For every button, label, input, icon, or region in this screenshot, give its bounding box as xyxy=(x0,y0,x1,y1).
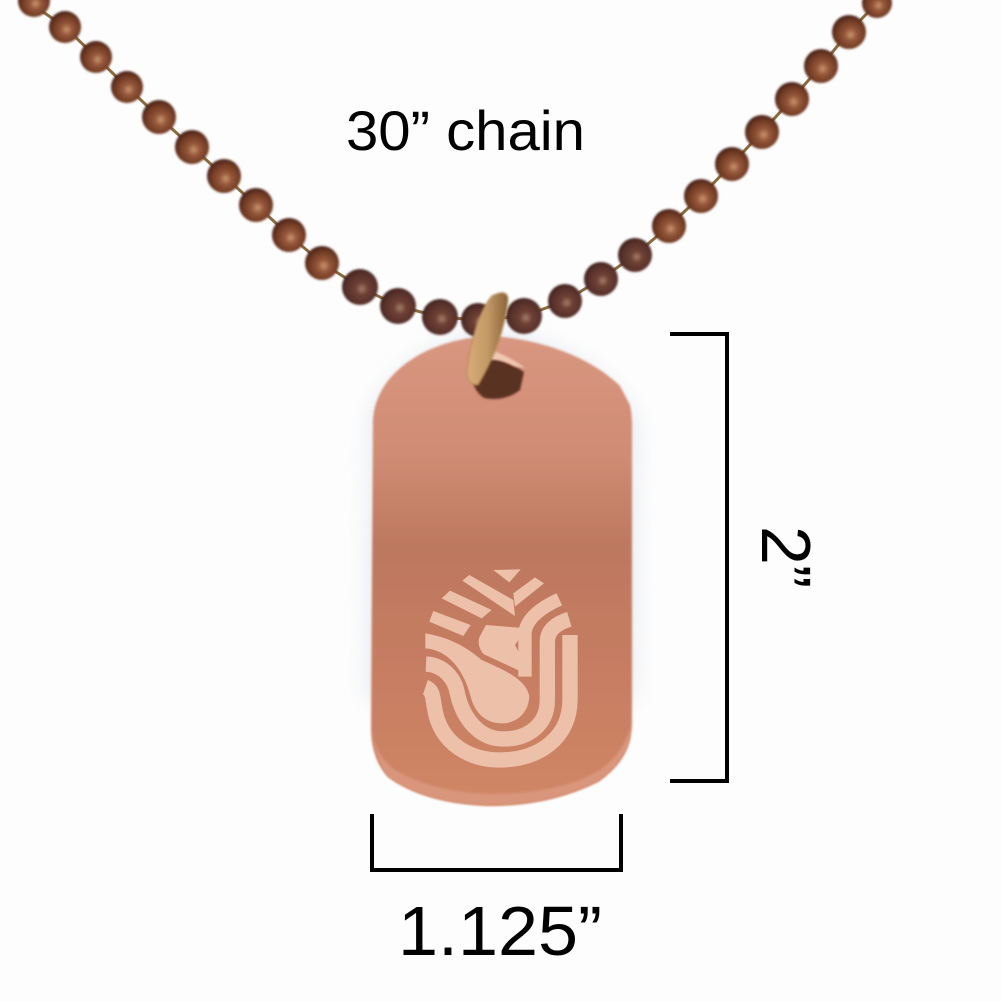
bracket: width xyxy=(372,814,621,870)
tag bottom rim xyxy=(373,728,630,805)
label: width: 1.125” xyxy=(398,892,602,970)
jump ring xyxy=(467,293,508,385)
tag shadow xyxy=(366,330,638,700)
hole highlight xyxy=(490,350,525,368)
tag body xyxy=(371,336,632,806)
chain wire xyxy=(30,3,877,320)
engraved logo xyxy=(425,569,570,760)
logo chevron bands xyxy=(462,575,515,616)
logo concentric bands xyxy=(525,599,559,677)
tag hole xyxy=(473,358,524,399)
logo S upper xyxy=(479,625,531,676)
chain beads xyxy=(18,0,892,337)
logo S lower xyxy=(425,633,529,723)
bracket: height xyxy=(670,334,727,781)
label: height: 2” xyxy=(747,526,825,588)
label: chain length: 30” chain xyxy=(346,99,585,162)
logo top triangle xyxy=(493,569,521,582)
copper tag xyxy=(371,336,632,806)
